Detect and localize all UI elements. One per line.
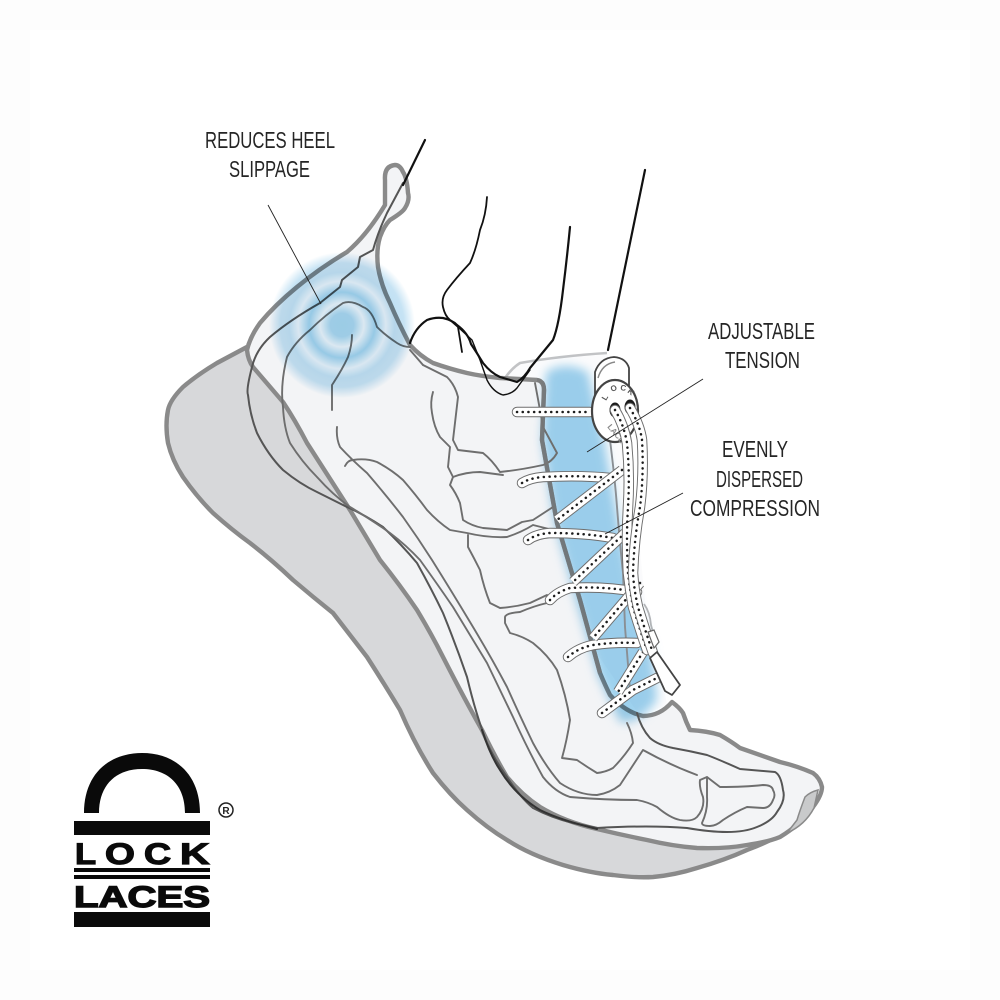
lace row 5: [568, 643, 637, 657]
lace row 3: [528, 533, 613, 540]
window edge: [537, 380, 600, 673]
diagonal lace 3: [573, 533, 625, 582]
lock fastener: O: [609, 383, 618, 394]
lock fastener: L: [600, 393, 610, 402]
lace row 1: [517, 411, 590, 413]
logo: Lock Laces padlock: K: [180, 837, 210, 871]
ankle lines: [403, 140, 645, 395]
lace row 6: [602, 678, 657, 713]
logo: Lock Laces padlock: [74, 753, 233, 927]
leader line: heel: [268, 205, 321, 304]
callout: reduces heel slippage: [205, 127, 335, 182]
logo: Lock Laces padlock: L: [75, 837, 96, 870]
callout: evenly dispersed compression: EVENLY: [722, 436, 788, 462]
blue compression zone: [542, 366, 657, 722]
lace row 2: [522, 476, 610, 483]
shoe upper: [247, 165, 822, 848]
logo: Lock Laces padlock: R: [222, 806, 230, 817]
callout: adjustable tension: ADJUSTABLE: [708, 318, 815, 344]
leader line: tension: [587, 379, 703, 452]
heel glow rings: [269, 252, 415, 398]
lock fastener: K: [626, 387, 636, 397]
lace knot and aglet: [648, 630, 680, 695]
logo: Lock Laces padlock: O: [105, 838, 135, 871]
logo: Lock Laces padlock: LACES: [74, 881, 210, 914]
callout: reduces heel slippage: REDUCES HEEL: [205, 127, 335, 153]
shoe tongue: [505, 353, 667, 716]
diagonal lace 4: [593, 583, 640, 638]
diagonal lace 5: [618, 652, 643, 692]
main lace strand right: [630, 408, 653, 653]
toe cap: [787, 790, 818, 833]
foot skeleton lines: [248, 183, 784, 832]
diagonal lace 2: [557, 470, 622, 520]
shoe sole: [166, 347, 780, 877]
lace row 4: [550, 588, 637, 600]
logo: Lock Laces padlock: C: [144, 837, 171, 871]
callout: reduces heel slippage: SLIPPAGE: [229, 156, 310, 182]
callout: adjustable tension: TENSION: [725, 347, 800, 373]
lock fastener: C: [620, 383, 627, 393]
lock fastener: LACES: [605, 423, 630, 450]
leader line: compression: [605, 493, 683, 534]
callout: evenly dispersed compression: COMPRESSION: [690, 495, 820, 521]
callout: adjustable tension: [708, 318, 815, 373]
main lace strand left: [615, 410, 647, 650]
lock fastener: [592, 357, 638, 450]
callout: evenly dispersed compression: [690, 436, 820, 521]
callout: evenly dispersed compression: DISPERSED: [716, 466, 803, 492]
tongue inner edge: [610, 440, 630, 690]
